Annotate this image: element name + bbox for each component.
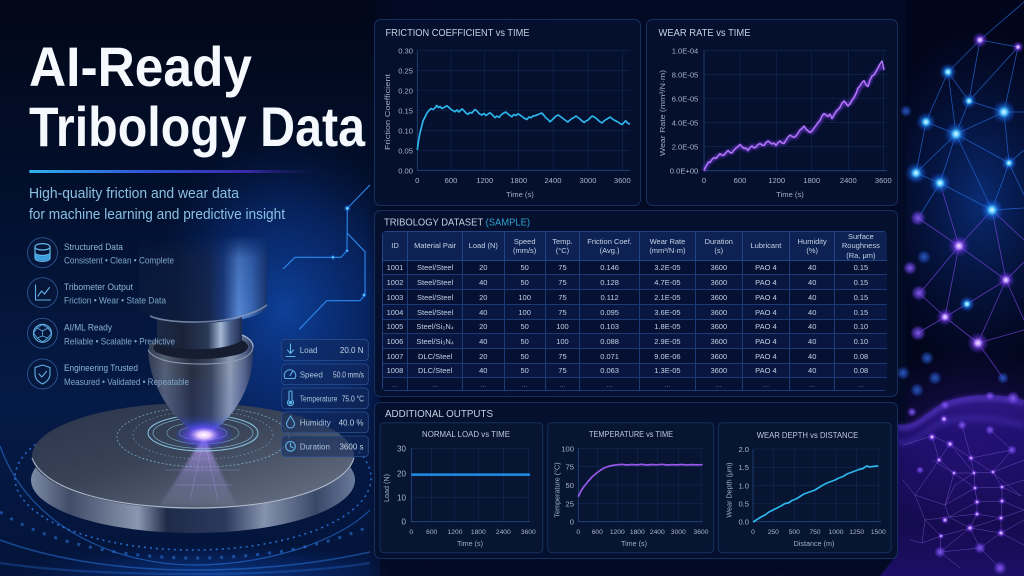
chart: normal load vs time [380, 423, 543, 553]
chart: temperature vs time: 100 [561, 444, 574, 453]
data table: Steel/Steel [417, 263, 453, 272]
circuit traces [283, 185, 370, 329]
feature: tribometer output [28, 278, 167, 308]
chart: wear depth vs distance: 750 [809, 529, 821, 536]
chart: normal load vs time: 2400 [496, 529, 511, 536]
data table: 3.6E-05 [654, 308, 681, 316]
data table: 40 [479, 366, 487, 375]
data table: 40 [808, 278, 816, 286]
data table: PAO 4 [755, 292, 777, 302]
data table: 40 [808, 322, 816, 331]
chart: normal load vs time: 0 [409, 529, 413, 536]
data table: Steel/Steel [417, 278, 453, 286]
chart: normal load vs time: Load (N) [382, 474, 391, 502]
data table: PAO 4 [755, 352, 777, 360]
data table: 50 [520, 366, 529, 375]
chart: normal load vs time: Time (s) [457, 539, 483, 548]
tribometer probe [139, 235, 267, 450]
data table: 100 [518, 292, 531, 302]
friction curve [417, 106, 630, 150]
data table: PAO 4 [755, 308, 777, 316]
data table: 3600 [710, 308, 727, 316]
card: humidity [282, 412, 368, 433]
data table: ... [716, 380, 722, 388]
data table: 50 [520, 278, 529, 286]
data table: 0.15 [854, 278, 868, 286]
data table: 1002 [387, 278, 403, 286]
chart: temperature vs time: TEMPERATURE vs TIME [589, 429, 673, 439]
data table: 40 [808, 263, 816, 272]
panel: wear rate chart: 600 [734, 176, 746, 185]
panel: additional outputs: ADDITIONAL OUTPUTS [385, 409, 493, 420]
panel: wear rate chart: 2.0E-05 [672, 143, 698, 152]
data table: Steel/Steel [417, 292, 453, 302]
data table: ... [809, 380, 815, 388]
data table: 40 [808, 366, 816, 375]
data table: ID [391, 241, 399, 250]
data table: Steel/Steel [417, 308, 453, 316]
title underline [29, 170, 320, 173]
wear depth curve [753, 466, 878, 522]
data table: PAO 4 [755, 278, 777, 286]
feature: engineering trusted [28, 359, 189, 389]
panel: friction coefficient chart: 2400 [545, 176, 561, 185]
data table: PAO 4 [755, 336, 777, 346]
data table: Load (N) [469, 241, 498, 250]
data table: Duration [705, 237, 733, 246]
chart: wear depth vs distance: 1.5 [738, 463, 749, 472]
chart: temperature vs time: 0 [576, 529, 580, 536]
data table: 1003 [387, 292, 403, 302]
panel: wear rate chart: 6.0E-05 [672, 94, 698, 104]
data table: 20 [479, 292, 487, 302]
feature: structured data: Consistent • Clean • Complete [64, 256, 174, 266]
data table: 0.15 [854, 263, 868, 272]
feature: engineering trusted: Engineering Trusted [64, 363, 138, 374]
data table [382, 231, 887, 391]
subtitle: for machine learning and predictive insight [29, 207, 285, 223]
data table: Humidity [798, 237, 827, 246]
panel: additional outputs [374, 402, 898, 558]
data table: 0.08 [854, 352, 868, 360]
chart: temperature vs time: 75 [566, 463, 574, 472]
data table: Lubricant [750, 241, 781, 250]
chart: normal load vs time: 1800 [471, 529, 486, 536]
chart: normal load vs time: 10 [397, 493, 406, 502]
card: temperature: 75.0 °C [342, 394, 364, 404]
chart: temperature vs time: 1200 [610, 529, 625, 536]
data table: 3600 [710, 352, 727, 360]
data table: 100 [556, 322, 569, 331]
data table: Steel/Si₃N₄ [416, 336, 454, 346]
data table: 75 [558, 263, 567, 272]
data table: Friction Coef. [587, 237, 632, 246]
neural network graphic [896, 2, 1024, 397]
data table: (mm/s) [513, 246, 536, 255]
title: AI-Ready [29, 35, 252, 98]
card: humidity: Humidity [300, 418, 331, 428]
data table: 1.8E-05 [654, 322, 681, 331]
panel: tribology dataset: TRIBOLOGY DATASET (SAMPLE) [384, 218, 530, 228]
title [29, 35, 366, 158]
data table: 1001 [387, 263, 403, 272]
chart: wear depth vs distance: 0.5 [738, 500, 749, 508]
data table: 0.095 [600, 308, 619, 316]
data table: 0.088 [600, 336, 619, 346]
panel: friction coefficient chart [374, 20, 640, 206]
card: speed: 50.0 mm/s [333, 370, 364, 380]
chart: normal load vs time: 600 [426, 529, 438, 536]
data table: 0.08 [854, 366, 868, 375]
data table: 1007 [387, 352, 403, 360]
chart: wear depth vs distance: 1500 [871, 529, 886, 536]
data table: 0.103 [600, 322, 619, 331]
data table: 40 [808, 352, 816, 360]
data table: 40 [808, 336, 816, 346]
data table: (mm³/N·m) [649, 246, 686, 255]
data table: 0.071 [600, 352, 619, 360]
chart: temperature vs time: 50 [566, 481, 574, 490]
card: load [282, 340, 368, 360]
data table: PAO 4 [755, 263, 777, 272]
data table: ... [763, 380, 769, 388]
chart: normal load vs time: 0 [401, 518, 406, 527]
data table: 2.1E-05 [654, 292, 681, 302]
data table: DLC/Steel [418, 352, 452, 360]
chart: temperature vs time: 600 [592, 529, 603, 536]
panel: friction coefficient chart: Friction Coefficient [383, 73, 392, 150]
panel: tribology dataset [374, 210, 898, 396]
data table: 40 [808, 292, 816, 302]
data table: 3600 [710, 336, 727, 346]
chart: wear depth vs distance: 1.0 [738, 481, 749, 490]
panel: wear rate chart: 2400 [840, 176, 857, 185]
data table: ... [522, 380, 528, 388]
chart: wear depth vs distance: WEAR DEPTH vs DISTANCE [757, 430, 859, 440]
panel: friction coefficient chart: 0.25 [398, 67, 413, 76]
data table: Steel/Si₃N₄ [416, 322, 454, 331]
chart: temperature vs time: 25 [566, 499, 574, 508]
panel: friction coefficient chart: 0.30 [398, 47, 413, 56]
card: humidity: 40.0 % [339, 418, 364, 428]
panel: friction coefficient chart: 0.20 [398, 86, 413, 96]
panel: friction coefficient chart: 1200 [476, 176, 493, 185]
panel: friction coefficient chart: 0 [415, 176, 419, 185]
card: duration [282, 436, 368, 457]
data table: 0.15 [854, 292, 868, 302]
data table: (Ra, μm) [846, 251, 876, 260]
chart: wear depth vs distance [718, 423, 891, 553]
panel: wear rate chart: Time (s) [776, 190, 804, 199]
card: load: Load [300, 346, 317, 355]
chart: wear depth vs distance: Distance (m) [794, 539, 834, 548]
data table: DLC/Steel [418, 366, 452, 375]
chart: wear depth vs distance: Wear Depth (μm) [724, 462, 734, 518]
data table: 0.146 [600, 263, 619, 272]
subtitle [29, 186, 285, 223]
test condition cards [282, 340, 368, 457]
data table: Surface [848, 232, 874, 241]
chart: wear depth vs distance: 1000 [829, 529, 844, 536]
panel: friction coefficient chart: 3600 [614, 176, 631, 185]
card: speed: Speed [300, 370, 323, 380]
data table: 3600 [710, 292, 727, 302]
data table: 3600 [710, 278, 727, 286]
data table: 50 [520, 263, 529, 272]
data table: Wear Rate [650, 237, 685, 246]
chart: normal load vs time: 30 [397, 444, 406, 453]
subtitle: High-quality friction and wear data [29, 186, 240, 202]
panel: wear rate chart: Wear Rate (mm³/N·m) [658, 69, 667, 156]
panel: friction coefficient chart: 0.15 [398, 106, 413, 116]
data table: 50 [520, 336, 529, 346]
data table: 0.063 [600, 366, 619, 375]
data table: 75 [558, 278, 567, 286]
panel: friction coefficient chart: 600 [445, 176, 457, 185]
feature: AI/ML ready: AI/ML Ready [64, 322, 112, 334]
data table: 3.2E-05 [654, 263, 681, 272]
data table: 0.15 [854, 308, 868, 316]
panel: wear rate chart: 0 [702, 176, 706, 185]
data table: (%) [806, 246, 818, 255]
panel: friction coefficient chart: Time (s) [506, 190, 534, 199]
data table: Material Pair [414, 241, 456, 250]
data table: 9.0E-06 [654, 352, 681, 360]
chart: wear depth vs distance: 1250 [849, 529, 864, 536]
data table: 20 [479, 352, 487, 360]
data table: (s) [714, 246, 723, 255]
chart: temperature vs time: 3600 [694, 529, 709, 536]
card: load: 20.0 N [340, 346, 364, 355]
card: duration: Duration [300, 442, 330, 452]
data table: PAO 4 [755, 322, 777, 331]
data table: ... [432, 380, 438, 388]
chart: temperature vs time: 1800 [630, 529, 645, 536]
chart: temperature vs time: Temperature (°C) [552, 462, 562, 518]
panel: wear rate chart: 1200 [768, 176, 785, 185]
data table: 1004 [387, 308, 403, 316]
data table: ... [606, 380, 613, 388]
data table: 20 [479, 322, 487, 331]
data table: 20 [479, 263, 487, 272]
panel: wear rate chart: 3600 [875, 176, 892, 185]
data table: 3600 [710, 322, 727, 331]
panel: friction coefficient chart: FRICTION COEFFICIENT vs TIME [386, 28, 530, 39]
panel: friction coefficient chart: 3000 [580, 176, 596, 185]
data table: (Avg.) [600, 246, 620, 255]
data table: 0.128 [600, 278, 619, 286]
card: temperature: Temperature [300, 394, 338, 404]
data table: ... [480, 380, 486, 388]
feature: tribometer output: Friction • Wear • State Data [64, 296, 167, 306]
data table: 50 [520, 352, 529, 360]
chart: normal load vs time: 3600 [521, 529, 536, 536]
data table: 75 [558, 352, 567, 360]
data table: ... [664, 380, 671, 388]
wear curve [704, 61, 884, 171]
data table: Speed [514, 237, 536, 246]
data table: ... [392, 380, 398, 388]
card: temperature [282, 388, 368, 409]
wireframe mesh wave [880, 391, 1024, 576]
data table: ... [858, 380, 864, 388]
feature: AI/ML ready [28, 318, 175, 348]
feature: structured data: Structured Data [64, 242, 124, 253]
chart: temperature vs time: 2400 [650, 529, 665, 536]
data table: 0.10 [854, 336, 868, 346]
data table: 4.7E-05 [654, 278, 681, 286]
chart: wear depth vs distance: 0 [751, 529, 755, 536]
panel: friction coefficient chart: 0.10 [398, 126, 413, 135]
data table: ... [559, 380, 566, 388]
panel: wear rate chart: 0.0E+00 [670, 167, 698, 176]
chart: temperature vs time: 0 [570, 518, 574, 527]
data table: 3600 [710, 366, 727, 375]
panel: wear rate chart: 1800 [803, 176, 820, 185]
data table: 40 [479, 278, 487, 286]
data table: 100 [556, 336, 569, 346]
feature: engineering trusted: Measured • Validated • Repeatable [64, 377, 189, 388]
data table: 40 [479, 308, 487, 316]
chart: wear depth vs distance: 0.0 [738, 518, 749, 527]
card: duration: 3600 s [339, 442, 364, 452]
chart: normal load vs time: 20 [397, 469, 406, 478]
data table: 75 [558, 292, 567, 302]
chart: wear depth vs distance: 2.0 [738, 445, 749, 454]
chart: temperature vs time [548, 423, 714, 553]
feature: tribometer output: Tribometer Output [64, 282, 133, 293]
data table: 40 [479, 336, 487, 346]
test disc [31, 403, 355, 533]
chart: wear depth vs distance: 250 [768, 529, 779, 536]
title: Tribology Data [29, 95, 366, 158]
chart: temperature vs time: Time (s) [621, 539, 647, 548]
data table: 50 [520, 322, 529, 331]
feature list [28, 238, 189, 389]
panel: friction coefficient chart: 0.00 [398, 166, 413, 175]
load curve [411, 474, 530, 476]
data table: 0.10 [854, 322, 868, 331]
data table: 40 [808, 308, 816, 316]
data table: 1005 [387, 322, 403, 331]
data table: 2.9E-05 [654, 336, 681, 346]
data table: 1.3E-05 [654, 366, 681, 375]
chart: wear depth vs distance: 500 [789, 529, 800, 536]
chart: temperature vs time: 3000 [671, 529, 686, 536]
data table: PAO 4 [755, 366, 777, 375]
data table: 3600 [710, 263, 727, 272]
data table: (°C) [556, 246, 569, 255]
panel: wear rate chart: 4.0E-05 [672, 119, 698, 128]
data table: 100 [518, 308, 531, 316]
chart: normal load vs time: 1200 [448, 529, 463, 536]
data table: Roughness [842, 241, 880, 250]
panel: friction coefficient chart: 1800 [510, 176, 527, 185]
data table: 0.112 [600, 292, 619, 302]
panel: wear rate chart [646, 20, 898, 206]
data table: 1008 [387, 366, 403, 375]
panel: wear rate chart: 8.0E-05 [672, 70, 698, 79]
data table: 75 [558, 366, 567, 375]
panel: wear rate chart: 1.0E-04 [672, 46, 698, 55]
data table: 1006 [387, 336, 403, 346]
card: speed [282, 364, 368, 385]
temperature curve [578, 464, 703, 497]
feature: AI/ML ready: Reliable • Scalable • Predictive [64, 336, 175, 348]
data table: 75 [558, 308, 567, 316]
panel: wear rate chart: WEAR RATE vs TIME [658, 28, 751, 39]
floor rings [0, 406, 371, 574]
data table: Temp. [552, 237, 573, 246]
panel: friction coefficient chart: 0.05 [398, 146, 413, 155]
chart: normal load vs time: NORMAL LOAD vs TIME [422, 429, 510, 439]
feature: structured data [28, 238, 174, 268]
